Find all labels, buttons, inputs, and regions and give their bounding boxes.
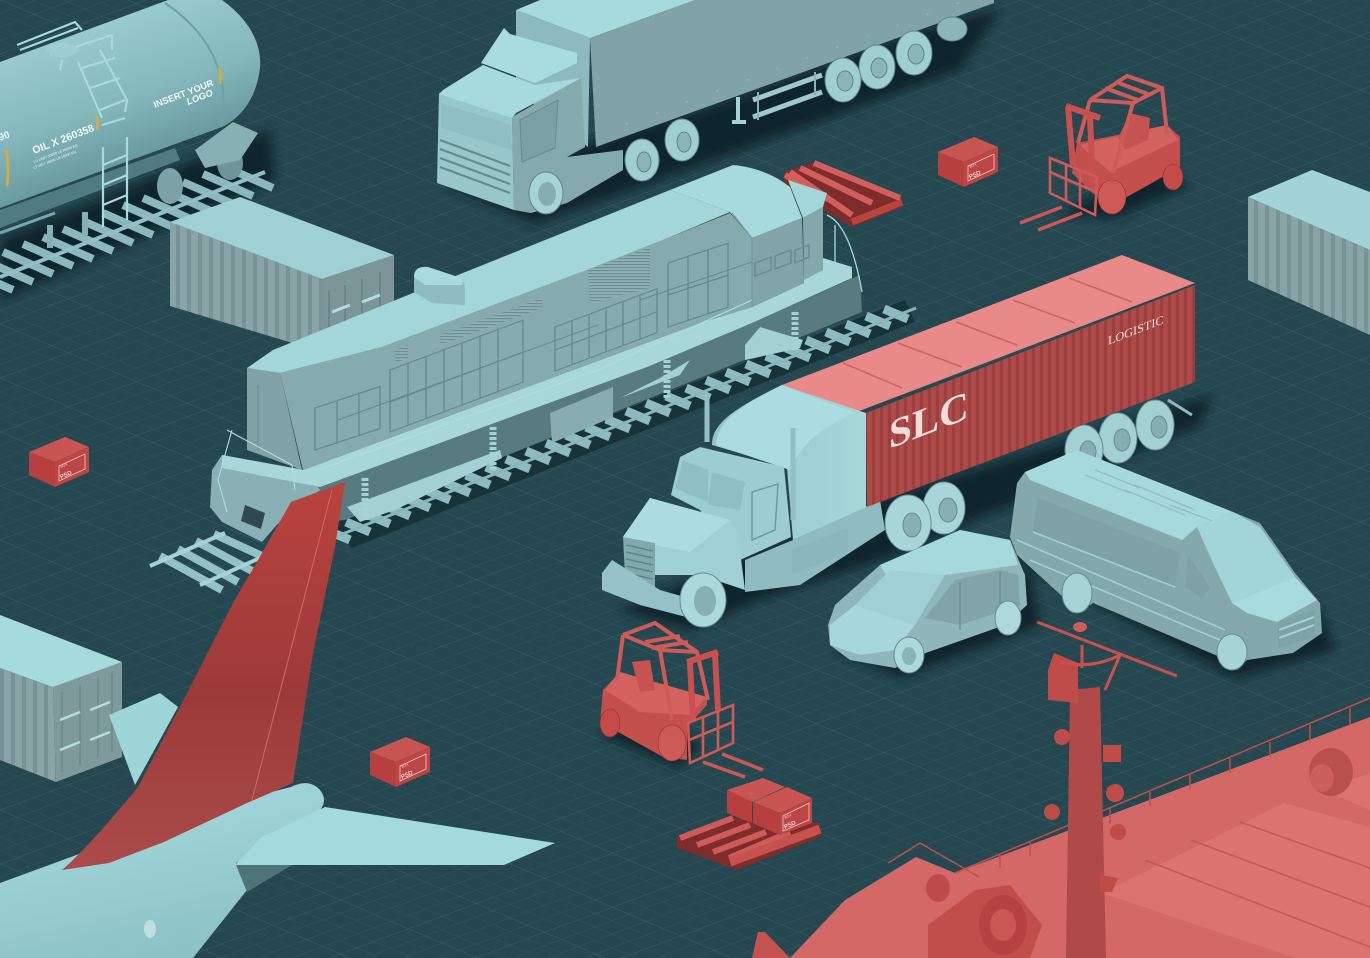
locomotive running board <box>222 267 852 487</box>
truck cab <box>671 447 791 560</box>
tail fin <box>62 482 345 870</box>
truck bumper <box>602 560 695 618</box>
truck fuel tank <box>792 528 848 575</box>
locomotive coupler end <box>210 455 320 542</box>
equalizers <box>347 450 502 522</box>
rear walkway <box>804 258 852 285</box>
exhaust stacks <box>707 393 793 520</box>
fuselage <box>0 783 324 958</box>
van windshield <box>1197 512 1295 603</box>
exhaust hatch <box>414 267 465 305</box>
fin seam <box>252 490 332 800</box>
van roof <box>1025 450 1233 540</box>
ship hull deck <box>790 717 1370 958</box>
locomotive handrail <box>218 300 752 512</box>
trailer leg <box>1168 400 1192 415</box>
forklift body <box>1072 125 1180 200</box>
container: upper left <box>170 197 394 352</box>
trailer side rivets <box>596 0 994 135</box>
container roof <box>782 255 1195 413</box>
cargo ship <box>752 622 1370 958</box>
stacked box right: BOX <box>784 813 793 820</box>
stacked box right: PSD <box>783 820 798 831</box>
ship mast <box>1037 622 1177 958</box>
grille <box>440 140 510 193</box>
locomotive rail track <box>150 300 916 590</box>
tank lettering: OIL X 260358 <box>31 122 96 157</box>
trailer front <box>516 10 590 147</box>
forklift forks <box>703 754 763 777</box>
fuel tank <box>550 387 613 443</box>
right stabilizer <box>235 807 555 865</box>
tank end seam <box>165 3 223 127</box>
tank lettering: LD LIMIT 30000 LB 28000 KG <box>33 143 79 164</box>
cab front <box>437 93 514 210</box>
short hood <box>788 180 827 280</box>
small box: left: PSD <box>59 470 74 481</box>
locomotive cab windows <box>755 245 809 276</box>
forklift seat <box>1118 113 1150 150</box>
ship railing <box>888 698 1370 877</box>
small van side windows <box>925 570 1020 625</box>
locomotive nose front <box>247 368 302 470</box>
small van roof <box>880 530 1018 590</box>
forklift seat <box>632 660 655 692</box>
forklift: lower <box>600 623 763 777</box>
trailer wheels <box>825 17 967 102</box>
forklift body <box>600 672 707 760</box>
small box: center <box>370 737 430 787</box>
forklift forks <box>1020 207 1082 230</box>
small box: top: PSD <box>968 170 983 181</box>
trailer axle wheels <box>1065 400 1174 475</box>
van hood <box>1232 577 1317 622</box>
locomotive louvres <box>395 247 650 363</box>
forklift carriage <box>688 705 733 763</box>
forklift cage <box>617 623 708 720</box>
container doors <box>329 272 380 345</box>
winch machinery <box>926 748 1353 958</box>
van side window <box>1033 498 1180 587</box>
trailer side <box>590 0 994 147</box>
stabilizer shadow <box>236 865 292 892</box>
tank ladder <box>17 22 127 227</box>
forklift carriage <box>1050 158 1097 215</box>
truck hood <box>623 498 745 590</box>
locomotive hood roof <box>247 190 730 373</box>
container: lower left <box>0 615 122 782</box>
forklift mast <box>687 652 718 720</box>
locomotive side panels <box>258 213 752 450</box>
forklift wheels <box>600 709 620 737</box>
truck grille <box>623 537 655 590</box>
small box: top: BOX <box>969 162 978 169</box>
cab side <box>512 78 623 213</box>
left stabilizer <box>109 693 178 785</box>
truck door <box>752 484 778 540</box>
ground shadows <box>0 10 1335 768</box>
cab roof <box>670 165 802 238</box>
springs <box>365 312 795 520</box>
forklift mast <box>1066 106 1100 183</box>
cab side <box>752 218 804 307</box>
container: right edge <box>1248 170 1370 335</box>
sleeper top <box>716 385 854 470</box>
forklift wheels <box>1163 164 1183 190</box>
truck chassis <box>745 500 885 592</box>
cab front wheel <box>529 172 563 214</box>
large panel van <box>1010 450 1322 670</box>
cabin door mark <box>144 920 156 938</box>
small box: left: BOX <box>60 462 69 469</box>
tank car rail track <box>0 166 273 290</box>
coupler dark <box>241 505 265 529</box>
small van windshield <box>855 570 945 625</box>
yellow stripes <box>6 68 221 186</box>
cab door <box>520 100 558 162</box>
tank lettering <box>0 78 215 170</box>
SLC logo: SLC <box>889 382 969 459</box>
tank rail car <box>0 0 273 290</box>
bow stem <box>752 932 790 958</box>
cargo hatch panels <box>1102 803 1370 958</box>
van body lines <box>1017 532 1225 640</box>
small box: center: PSD <box>400 770 415 781</box>
van wheels <box>1062 573 1092 613</box>
tank body <box>0 0 260 208</box>
tank car bogie <box>0 122 258 248</box>
small van <box>828 530 1027 673</box>
windshield <box>441 103 512 150</box>
sleeper cab <box>712 385 866 540</box>
stacked box left <box>727 778 785 823</box>
pallet <box>677 817 820 870</box>
truck windshield <box>675 460 708 502</box>
locomotive rear ladder <box>827 215 862 292</box>
locomotive side wall <box>280 213 752 470</box>
LOGISTIC logo: LOGISTIC <box>1108 313 1164 348</box>
drive wheels <box>885 482 965 551</box>
van grille <box>1277 610 1315 648</box>
tank lettering: LOGO <box>185 87 215 107</box>
forklift: top <box>1020 76 1183 230</box>
locomotive undercarriage <box>265 275 862 525</box>
tank lettering: INSERT YOUR <box>152 78 215 110</box>
small box: top <box>938 137 998 187</box>
semi truck with tarp trailer <box>437 0 994 214</box>
small box: center: BOX <box>401 762 410 769</box>
diesel locomotive <box>150 165 916 590</box>
forklift cage <box>1078 76 1167 173</box>
trailer top <box>516 0 695 38</box>
tractor rear wheels <box>625 119 699 181</box>
wooden pallet: top <box>784 162 902 227</box>
small van wheels <box>995 601 1021 635</box>
stacked box right <box>753 787 812 835</box>
tank lettering: LT WGT 16000 LB 20000 KG <box>33 150 77 170</box>
cab roof <box>439 65 581 118</box>
pallet with boxes <box>677 778 820 870</box>
small van front <box>830 605 915 655</box>
roof deflector <box>481 28 577 83</box>
container side <box>866 285 1195 507</box>
small box: left <box>29 437 89 487</box>
airplane <box>0 482 555 958</box>
trailer landing gear and guards <box>732 72 822 122</box>
truck front wheel <box>680 573 726 627</box>
semi truck with red SLC container <box>602 255 1195 627</box>
